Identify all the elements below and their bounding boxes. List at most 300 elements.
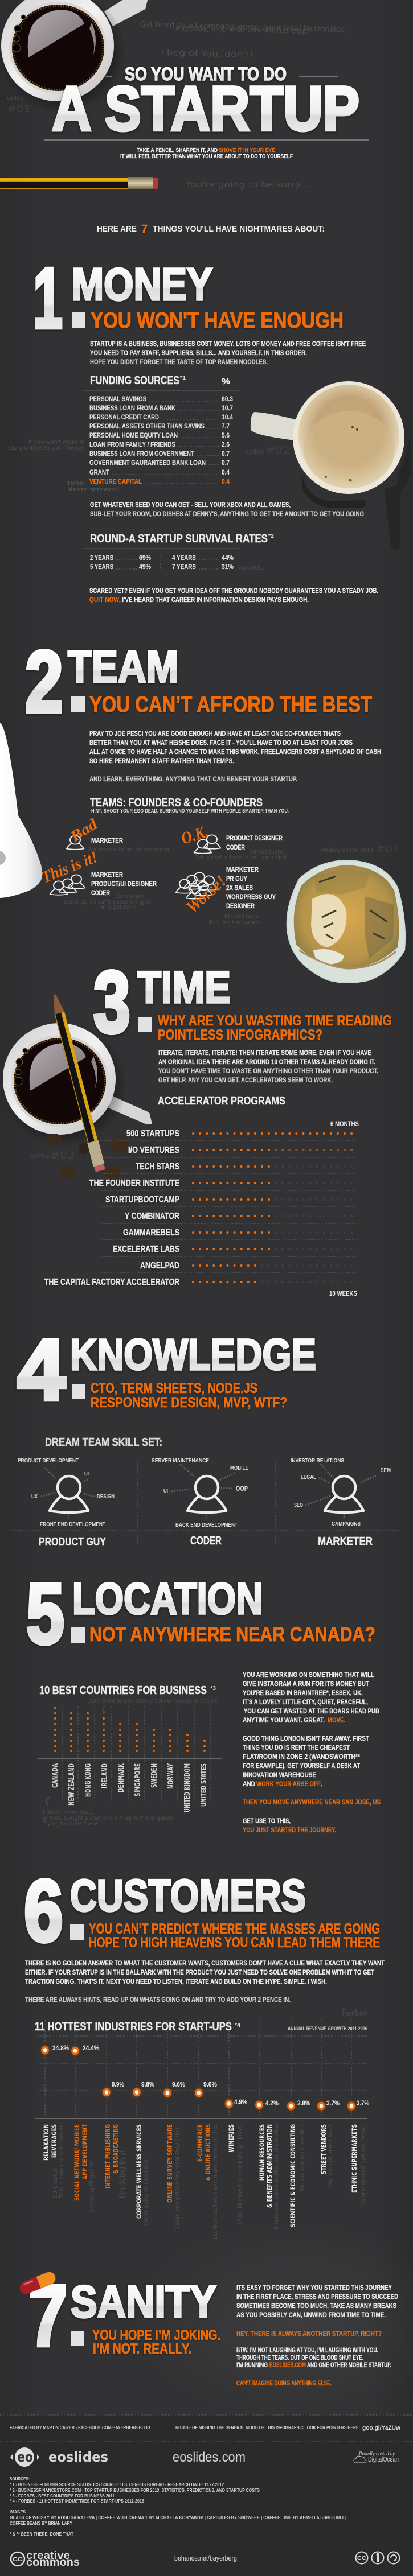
heading: 4 knowledge — [17, 1321, 316, 1417]
text block: intro: YOU NEED TO PAY STAFF, SUPPLIERS, BILLS... AND YOURSELF. IN THIS ORDER. — [90, 350, 307, 357]
heading: 5 location: LOCATION — [72, 1573, 263, 1623]
sources: GLASS OF WHISKY BY ROSITSA RALEVA | COFFEE WITH CREMA 1 BY MICHAELA KOBYAKOV | CAPSULES BY SNOWEEE | CAFFEE TIME BY AHMED AL-SHUKAILI | — [10, 2515, 346, 2520]
title — [44, 64, 369, 160]
table: funding sources: 7.7 — [222, 423, 230, 430]
text block: location: MOVE. — [328, 1717, 345, 1724]
icon: pill — [18, 2270, 58, 2296]
profile: marketer: INVESTOR RELATIONS — [291, 1458, 344, 1464]
team: worse: PR GUY — [226, 875, 247, 883]
profile: product guy: PRODUCT GUY — [39, 1536, 107, 1548]
chart: accelerator programs: ACCELERATOR PROGRAMS — [158, 1095, 285, 1107]
table: funding sources: PERSONAL HOME EQUITY LOAN — [89, 432, 178, 439]
table: survival rates: 5 YEARS — [90, 564, 113, 571]
text block: location: YOU'RE BASED IN BRAINTREE*, ESSEX, UK. — [243, 1690, 363, 1697]
handwritten notes header: anybody, stop with this startup crap! — [175, 23, 310, 36]
heading: 1 money: MONEY — [72, 259, 212, 310]
text block: location: AND — [243, 1781, 255, 1788]
industry labels: ONLINE SURVEY SOFTWARE — [166, 2124, 174, 2203]
industry labels: BEVERAGES — [50, 2124, 58, 2158]
handwritten notes header: You're going to be sorry... — [185, 180, 309, 189]
icon: coffee cup with pencil and beans — [0, 988, 152, 1180]
icon: mouse — [0, 723, 42, 898]
industry labels: HUMAN RESOURCES — [258, 2124, 266, 2181]
text block: team: PRAY TO JOE PESCI YOU ARE GOOD ENOUGH AND HAVE AT LEAST ONE CO-FOUNDER THATS — [89, 731, 341, 737]
industry labels: SOCIAL NETWORK/ MOBILE — [73, 2124, 81, 2201]
panel: 7 sanity — [18, 2268, 398, 2387]
chart: 11 hottest industries: 4.9% — [234, 2098, 247, 2106]
text block: iterate: YOU DON'T HAVE TIME TO WASTE ON ANYTHING OTHER THAN YOUR PRODUCT. — [158, 1068, 378, 1075]
team: ok: Almost there, — [250, 849, 284, 855]
text block: iterate: GET HELP, ANY YOU CAN GET. ACCELERATORS SEEM TO WORK. — [158, 1077, 333, 1084]
team: ok: Get a pretty face to sell your sh*t — [194, 855, 287, 861]
title: TAKE A PENCIL, SHARPEN IT, AND — [137, 147, 218, 154]
text block: location: IT'S A LOVELY LITTLE CITY, QUIET, PEACEFUL, — [243, 1699, 368, 1706]
chart: 11 hottest industries: 3.7% — [326, 2099, 340, 2107]
credits: goo.gl/YaZUw — [362, 2425, 400, 2431]
chart: 11 hottest industries — [35, 2007, 369, 2239]
profile: product guy: UI — [84, 1471, 89, 1477]
heading: 1 money: 1 — [33, 250, 63, 346]
icon: whisky glass — [287, 844, 405, 983]
subheading: here are 7 — [97, 223, 325, 236]
subheading: here are 7: 7 — [141, 223, 148, 236]
heading: 2 team: 2 — [25, 633, 63, 731]
text block: customers: THERE ARE ALWAYS HINTS, READ UP ON WHATS GOING ON AND TRY TO ADD YOUR 2 PENCE IN. — [25, 1997, 291, 2004]
text block: iterate — [158, 1050, 378, 1084]
logo: creative commons: creative — [26, 2550, 70, 2562]
table: funding sources: 10.4 — [222, 414, 234, 421]
industry labels: & BENEFITS ADMINISTRATION — [265, 2124, 273, 2208]
industry labels: You do sad, don't you? — [328, 2124, 334, 2187]
table: survival rates: 44% — [222, 555, 234, 562]
notes: money: If you won't make it — [28, 439, 84, 446]
table: funding sources: % — [222, 377, 230, 386]
text block: seed — [90, 502, 364, 518]
icon: coffee cup with pencil and beans: coffee — [30, 1153, 49, 1160]
team: ok: CODER — [226, 843, 245, 851]
table: funding sources: VENTURE CAPITAL — [89, 479, 142, 485]
notes: money: say goodbye to your friends — [8, 445, 84, 451]
icon: latte cup with stain — [251, 381, 411, 550]
sources: IMAGES — [10, 2509, 26, 2515]
profile: coder: UI — [163, 1488, 168, 1494]
industry labels: SCIENTIFIC & ECONOMIC CONSULTING — [289, 2124, 297, 2227]
panel: 1 money — [8, 250, 411, 604]
text block: team — [89, 731, 381, 783]
text block: sanity: HEY, THERE IS ALWAYS ANOTHER STARTUP, RIGHT? — [236, 2331, 382, 2338]
heading: 3 time — [93, 953, 392, 1051]
team: this is it: CODER — [91, 889, 110, 897]
profile: coder: BACK END DEVELOPMENT — [175, 1522, 238, 1528]
table: survival rates: 69% — [139, 555, 151, 562]
chart: 10 best countries: CANADA — [51, 1763, 60, 1788]
table: funding sources: 0.7 — [222, 451, 230, 458]
heading: 7 sanity: 7 — [28, 2268, 67, 2364]
heading: 6 customers: 6 — [24, 1862, 63, 1960]
chart: accelerator programs: TECH STARS — [136, 1162, 179, 1172]
text block: location: FOR EXAMPLE), GET YOURSELF A DESK AT — [243, 1763, 360, 1770]
team: bad: No muscle to get things going. — [89, 847, 171, 853]
panel: 2 team — [0, 633, 405, 983]
heading: 5 location: 5 — [26, 1565, 64, 1662]
team: worse: WORDPRESS GUY — [226, 893, 276, 901]
chart: accelerator programs: 10 WEEKS — [329, 1291, 357, 1297]
chart: 11 hottest industries: 9.6% — [203, 2080, 217, 2088]
profile: marketer: SEO — [294, 1502, 303, 1508]
handwritten notes header — [7, 20, 347, 189]
industry labels: INTERNET PUBLISHING — [104, 2124, 112, 2188]
heading: 2 team — [25, 633, 372, 731]
table: funding sources: BUSINESS LOAN FROM GOVERNMENT — [89, 451, 194, 458]
chart: accelerator programs — [44, 1095, 359, 1301]
table: survival rates: 2 YEARS — [90, 555, 113, 562]
industry labels: DUH, really? — [52, 2168, 59, 2198]
heading: 6 customers: CUSTOMERS — [70, 1870, 306, 1920]
industry labels: & ONLINE AUCTIONS — [204, 2124, 212, 2181]
icon: pencil horizontal — [0, 177, 158, 189]
table: funding sources: 60.3 — [222, 396, 233, 403]
chart: 10 best countries: SINGAPORE — [134, 1763, 142, 1796]
panel: 4 knowledge — [7, 1321, 400, 1548]
text block: sanity: EOSLIDES.COM — [269, 2362, 306, 2369]
industry labels: Annoying FB games... — [89, 2155, 95, 2212]
subheading: here are 7: THINGS YOU'LL HAVE NIGHTMARES ABOUT: — [153, 224, 325, 234]
table: funding sources: PERSONAL CREDIT CARD — [89, 414, 159, 421]
logo: creative commons: commons — [26, 2557, 80, 2569]
text block: sanity: THROUGH THE TEARS. OUT OF ONE BLOOD SHUT EYE. — [236, 2355, 363, 2361]
team: bad: MARKETER — [91, 836, 123, 844]
industry labels: Thats like the first one but high brow? — [237, 2124, 243, 2225]
team: this is it: Core team — [116, 893, 144, 900]
table: survival rates: 49% — [139, 564, 151, 571]
credits: IN CASE OF MISSING THE GENERAL MOOD OF THIS INFOGRAPHIC LOOK FOR POINTERS HERE: — [175, 2425, 360, 2430]
team: worse — [176, 865, 276, 926]
heading: 1 money — [33, 250, 344, 346]
text block: location: THEN YOU MOVE ANYWHERE NEAR SAN JOSE, US — [243, 1799, 381, 1806]
icon: whisky glass: #01 — [376, 844, 400, 855]
team: worse: Bloated team — [224, 914, 259, 920]
chart: 10 best countries: Trying to move there. — [42, 1821, 100, 1827]
team: worse: In it for the ladies. — [210, 920, 261, 926]
chart: accelerator programs: 6 MONTHS — [330, 1121, 359, 1128]
chart: 11 hottest industries: 3.7% — [357, 2099, 369, 2107]
industry labels: Let them sell sh*t and make money of this. — [212, 2124, 219, 2239]
text block: location: GOOD THING LONDON ISN'T FAR AWAY. FIRST — [243, 1736, 369, 1742]
table: funding sources: LOAN FROM FAMILY / FRIENDS — [89, 442, 175, 448]
title: IT WILL FEEL BETTER THAN WHAT YOU ARE ABOUT TO DO TO YOURSELF — [120, 153, 293, 160]
text block: location: GIVE INSTAGRAM A RUN FOR ITS MONEY BUT — [243, 1681, 369, 1688]
profile: marketer: SEM — [381, 1468, 391, 1474]
table: funding sources: GRANT — [89, 469, 109, 476]
text block: seed: SUB-LET YOUR ROOM, DO DISHES AT DENNY'S, ANYTHING TO GET THE AMOUNT TO GET YOU GOING — [90, 511, 364, 518]
chart: accelerator programs: I/O VENTURES — [128, 1145, 179, 1155]
panel: 5 location — [26, 1565, 381, 1834]
industry labels: You are going to use this — [300, 2124, 306, 2192]
text block: sanity — [236, 2285, 398, 2387]
heading: 7 sanity — [28, 2268, 220, 2364]
heading: 7 sanity: I’M NOT. REALLY. — [93, 2341, 191, 2357]
profile: product guy: UX — [31, 1494, 38, 1500]
panel: 3 time — [0, 953, 392, 1301]
table: funding sources: 10.7 — [222, 405, 233, 412]
industry labels: RELAXATION — [42, 2124, 50, 2161]
chart: 10 best countries: DENMARK — [117, 1763, 126, 1792]
chart: accelerator programs: STARTUPBOOTCAMP — [105, 1195, 179, 1205]
industry labels: APP DEVELOPMENT — [81, 2124, 89, 2179]
panel: 6 customers — [24, 1862, 385, 2239]
industry labels: & BROADCASTING — [112, 2124, 120, 2174]
industry labels: E-COMMERCE — [196, 2124, 204, 2162]
industry labels: Employees with benefits. Social benefits. — [273, 2124, 280, 2229]
handwritten notes header: Get hired by oil company, corpo, your local McDonalds, — [140, 20, 347, 35]
table: funding sources: *1 — [180, 375, 186, 381]
text block: seed: GET WHATEVER SEED YOU CAN GET - SELL YOUR XBOX AND ALL GAMES, — [90, 502, 291, 509]
credits — [10, 2425, 400, 2431]
text block: location: FLAT/ROOM IN ZONE 2 (WANDSWORTH** — [243, 1754, 360, 1761]
heading: 3 time: TIME — [137, 962, 231, 1012]
profile: product guy: DESIGN — [97, 1494, 115, 1500]
industry labels: ETHNIC SUPERMARKETS — [350, 2124, 358, 2193]
text block: intro — [90, 341, 366, 366]
handwritten notes header: #01 — [7, 104, 31, 115]
heading: 7 sanity: SANITY — [71, 2276, 216, 2327]
sources: * & ** BEEN THERE, DONE THAT — [10, 2531, 74, 2537]
text block: sanity: AS YOU POSSIBLY CAN, UNWIND FROM TIME TO TIME. — [236, 2312, 386, 2319]
industry labels — [42, 2124, 366, 2239]
notes: money: #02 — [265, 445, 290, 456]
handwritten notes header: I beg of You, don't! — [161, 47, 253, 60]
text block: sanity: CAN'T IMAGINE DOING ANYTHING ELSE. — [236, 2380, 332, 2387]
industry labels: CORPORATE WELLNESS SERVICES — [135, 2124, 143, 2219]
text block: location: THING YOU DO IS RENT THE CHEAPEST — [243, 1745, 350, 1751]
logo: eoslides — [10, 2447, 108, 2467]
sources: COFFEE BEANS BY BRIAN LARY — [10, 2520, 72, 2526]
chart: accelerator programs: Y COMBINATOR — [125, 1211, 179, 1221]
chart: 11 hottest industries: ANNUAL REVENUE GROWTH 2011-2016 — [288, 2026, 367, 2031]
table: funding sources: 0.4 — [222, 469, 230, 476]
team: worse: DESIGNER — [226, 902, 255, 910]
team: this is it: MARKETER — [91, 871, 123, 879]
sources: * 3 - FORBES - BEST COUNTRIES FOR BUSINESS 2011 — [10, 2493, 115, 2499]
profile: coder: MOBILE — [230, 1465, 248, 1472]
team: ok — [179, 822, 287, 861]
industry labels: You're going to need this — [143, 2159, 149, 2227]
table: funding sources — [83, 374, 240, 485]
url: eoslides.com: eoslides.com — [173, 2450, 246, 2465]
team: ok: O.K. — [179, 822, 211, 848]
icon: whisky glass: whiskey on the rocks — [321, 847, 373, 854]
industry labels: Cause you gotta know what they think. — [174, 2126, 181, 2229]
profile: product guy: FRONT END DEVELOPMENT — [40, 1522, 105, 1528]
chart: 11 hottest industries: 9.8% — [141, 2080, 154, 2088]
chart: 10 best countries: HONG KONG — [84, 1763, 93, 1797]
profile: product guy: PRODUCT DEVELOPMENT — [18, 1458, 79, 1464]
text block: intro: HOPE YOU DIDN'T FORGET THE TASTE OF TOP RAMEN NOODLES. — [90, 359, 268, 366]
heading: 4 knowledge: RESPONSIVE DESIGN, MVP, WTF? — [91, 1395, 287, 1411]
table: survival rates — [83, 533, 274, 571]
title: SO YOU WANT TO DO — [125, 64, 287, 84]
text block: iterate: AN ORIGINAL IDEA THERE ARE AROUND 10 OTHER TEAMS ALREADY DOING IT. — [158, 1059, 375, 1066]
text block: team: SO HIRE PERMANENT STAFF RATHER THAN TEMPS. — [89, 758, 234, 765]
title: SHOVE IT IN YOUR EYE — [219, 147, 275, 154]
text block: location: ANYTIME YOU WANT. GREAT. — [243, 1717, 325, 1724]
table: funding sources: 2.6 — [222, 442, 230, 448]
team: worse: 2X SALES — [226, 884, 253, 892]
text block: customers: TRACTION GOING. THAT'S IT. NEXT YOU NEED TO LISTEN, ITERATE AND BUILD ON THE HYPE. SIMPLE. I WISH. — [25, 1979, 327, 1985]
industry labels: I'm doing this! — [118, 2150, 127, 2198]
profile: coder: CODER — [190, 1535, 222, 1547]
notes: money: coffee — [246, 449, 264, 455]
industry labels: STREET VENDORS — [320, 2124, 328, 2174]
industry labels: This is going to sell forever. — [59, 2124, 65, 2199]
notes: money — [8, 439, 290, 493]
text block: team: AND LEARN. EVERYTHING. ANYTHING THAT CAN BENEFIT YOUR STARTUP. — [89, 776, 297, 783]
chart: 11 hottest industries: 4.2% — [265, 2099, 279, 2107]
notes: money: You're screwed! — [67, 487, 120, 493]
chart: 11 hottest industries: 24.8% — [52, 2044, 69, 2052]
chart: 10 best countries: NEW ZEALAND — [68, 1763, 76, 1806]
chart: 10 best countries: 10 BEST COUNTRIES FOR BUSINESS — [39, 1684, 207, 1697]
sources: * 4 - FORBES - 11 HOTTEST INDUSTRIES FOR START-UPS 2011-2016 — [10, 2498, 144, 2504]
chart: accelerator programs: ANGELPAD — [140, 1261, 179, 1271]
table: funding sources: PERSONAL ASSETS OTHER THAN SAVINS — [89, 423, 205, 430]
heading: 1 money: YOU WON'T HAVE ENOUGH — [91, 308, 344, 333]
table: funding sources: PERSONAL SAVINGS — [89, 396, 146, 403]
chart: 11 hottest industries: 11 HOTTEST INDUSTRIES FOR START-UPS — [35, 2021, 232, 2033]
chart: 11 hottest industries: 3.8% — [297, 2099, 310, 2107]
team: this is it: This is it! — [39, 848, 100, 887]
table: funding sources: 5.6 — [222, 432, 230, 439]
team: this is it — [39, 848, 157, 910]
text block: scared — [89, 588, 378, 604]
industry labels: It's pronounced "JAK SIE MASZ" — [360, 2124, 366, 2207]
text block: location — [243, 1672, 381, 1834]
table: survival rates: You wish... — [238, 565, 266, 571]
chart: accelerator programs: EXCELERATE LABS — [113, 1244, 179, 1254]
table: funding sources: 0.4 — [222, 479, 230, 485]
subheading: here are 7: HERE ARE — [97, 224, 137, 234]
chart: 11 hottest industries: 24.4% — [83, 2044, 99, 2052]
team: ok: PRODUCT DESIGNER — [226, 834, 283, 842]
url: behance: behance.net/bayerberg — [174, 2554, 237, 2562]
heading: 5 location — [26, 1565, 375, 1662]
profile: coder: SERVER MAINTENANCE — [152, 1458, 209, 1464]
team: this is it: Stock up on caffeinated dringks — [64, 899, 150, 905]
logo: creative commons — [11, 2550, 80, 2569]
chart: 11 hottest industries: *4 — [235, 2022, 240, 2029]
text block: location: WORK YOUR ARSE OFF — [256, 1781, 321, 1788]
table: survival rates: ROUND-A STARTUP SURVIVAL RATES — [90, 533, 268, 545]
chart: 10 best countries — [38, 1684, 222, 1827]
chart: 10 best countries: *3 — [210, 1685, 216, 1692]
chart: 10 best countries: IRELAND — [101, 1763, 109, 1788]
heading: 3 time: 3 — [93, 953, 130, 1051]
profile: coder — [152, 1458, 248, 1547]
chart: 10 best countries: Dont want to pay taxes? Follow Facebook to Éire — [87, 1697, 218, 1704]
sources — [10, 2476, 346, 2537]
profile: marketer: MARKETER — [318, 1535, 373, 1548]
chart: 10 best countries: UNITED STATES — [200, 1763, 208, 1807]
heading: dream team: DREAM TEAM SKILL SET: — [45, 1436, 162, 1449]
industry labels: WINERIES — [227, 2124, 235, 2152]
text block: scared: . I'VE HEARD THAT CAREER IN INFORMATION DESIGN PAYS ENOUGH. — [119, 597, 309, 604]
table: survival rates: *2 — [268, 533, 274, 539]
heading: teams: TEAMS: FOUNDERS & CO-FOUNDERS — [90, 797, 263, 809]
text block: intro: STARTUP IS A BUSINESS, BUSINESSES COST MONEY. LOTS OF MONEY AND FREE COFFEE ISN'T FREE — [90, 341, 366, 348]
sources: SOURCES: — [10, 2476, 30, 2482]
chart: 10 best countries: already bought a coat and a mug with the queen. — [43, 1815, 175, 1821]
icons: license — [355, 2552, 400, 2564]
chart: accelerator programs: GAMMAREBELS — [123, 1228, 179, 1238]
team: worse: MARKETER — [226, 865, 259, 873]
team: this is it: and get to it! — [101, 904, 137, 910]
logo: digitalocean: Proudly hosted by — [358, 2451, 395, 2457]
heading: 2 team: TEAM — [68, 641, 179, 692]
heading: 6 customers — [24, 1862, 380, 1960]
footer — [0, 2415, 413, 2569]
logo: digitalocean: DigitalOcean — [368, 2455, 399, 2463]
heading: 3 time: POINTLESS INFOGRAPHICS? — [158, 1027, 322, 1043]
title: A STARTUP — [52, 74, 359, 144]
heading: 4 knowledge: KNOWLEDGE — [70, 1330, 316, 1379]
team: bad — [67, 815, 171, 853]
text block: location: . — [321, 1781, 322, 1788]
team: this is it: PRODUCT/UI DESIGNER — [91, 880, 157, 888]
text block: location: INNOVATION WAREHOUSE — [243, 1772, 316, 1779]
table: survival rates: 4 YEARS — [172, 555, 196, 562]
heading: 4 knowledge: CTO, TERM SHEETS, NODE.JS — [91, 1380, 257, 1396]
profile: product guy — [18, 1458, 115, 1548]
text block: sanity: I'M RUNNING — [236, 2362, 268, 2369]
chart: 11 hottest industries: 9.9% — [112, 2080, 124, 2088]
sources: * 1 - BUSINESS FUNDING SOURCE STATISTICS SOURCE: U.S. CENSUS BUREAU - RESEARCH DATE: 11.27.2012 — [10, 2482, 224, 2487]
handwritten notes header: coffee — [7, 96, 23, 101]
text block: iterate: ITERATE, ITERATE, ITERATE! THEN ITERATE SOME MORE. EVEN IF YOU HAVE — [158, 1050, 371, 1057]
icon: coffee cup with pencil and beans: #03 — [50, 1150, 75, 1161]
heading: 7 sanity: YOU HOPE I’M JOKING. — [92, 2327, 220, 2343]
profile: marketer: CAMPAIGNS — [332, 1521, 361, 1527]
table: funding sources: FUNDING SOURCES — [90, 374, 179, 387]
logo: digitalocean — [354, 2451, 399, 2463]
heading: 4 knowledge: 4 — [17, 1321, 66, 1417]
text block: scared: QUIT NOW — [89, 597, 119, 604]
team: bad: Bad — [67, 815, 101, 846]
profile: coder: OOP — [236, 1486, 248, 1493]
table: funding sources: BUSINESS LOAN FROM A BANK — [89, 405, 176, 412]
text block: location: YOU JUST STARTED THE JOURNEY. — [243, 1827, 336, 1834]
heading: teams: HINT: SHOOT YOUR EGO DEAD, SURROUND YOURSELF WITH PEOPLE SMARTER THAN YOU. — [91, 808, 289, 814]
text block: customers — [25, 1960, 385, 2004]
chart: accelerator programs: THE FOUNDER INSTITUTE — [89, 1178, 179, 1188]
profile: marketer — [291, 1458, 391, 1548]
table: survival rates: 31% — [222, 564, 234, 571]
logo: eoslides: eo — [17, 2449, 33, 2465]
chart: 11 hottest industries: 9.6% — [172, 2080, 185, 2088]
table: survival rates: 7 YEARS — [172, 564, 196, 571]
table: funding sources: GOVERNMENT GAURANTEED BANK LOAN — [89, 460, 206, 467]
logo: creative commons: CC — [13, 2556, 23, 2563]
profile: marketer: LEGAL — [301, 1474, 316, 1481]
team: worse: Worse! — [183, 872, 230, 917]
text block: location: GET USE TO THIS, — [243, 1818, 291, 1825]
chart: 11 hottest industries: Forbes — [342, 2007, 367, 2018]
notes: money: Haha! — [68, 480, 85, 487]
chart: accelerator programs: THE CAPITAL FACTORY ACCELERATOR — [44, 1277, 179, 1287]
icons: license: CC — [357, 2556, 366, 2562]
text block: location: YOU CAN GET WASTED AT THE BOARS HEAD PUB — [244, 1708, 379, 1715]
credits: FABRICATED BY MARTIN CAIZER - FACEBOOK.COM/BAYERBERG.BLOG — [10, 2425, 150, 2430]
chart: 10 best countries: I didn't know that, — [43, 1810, 92, 1816]
